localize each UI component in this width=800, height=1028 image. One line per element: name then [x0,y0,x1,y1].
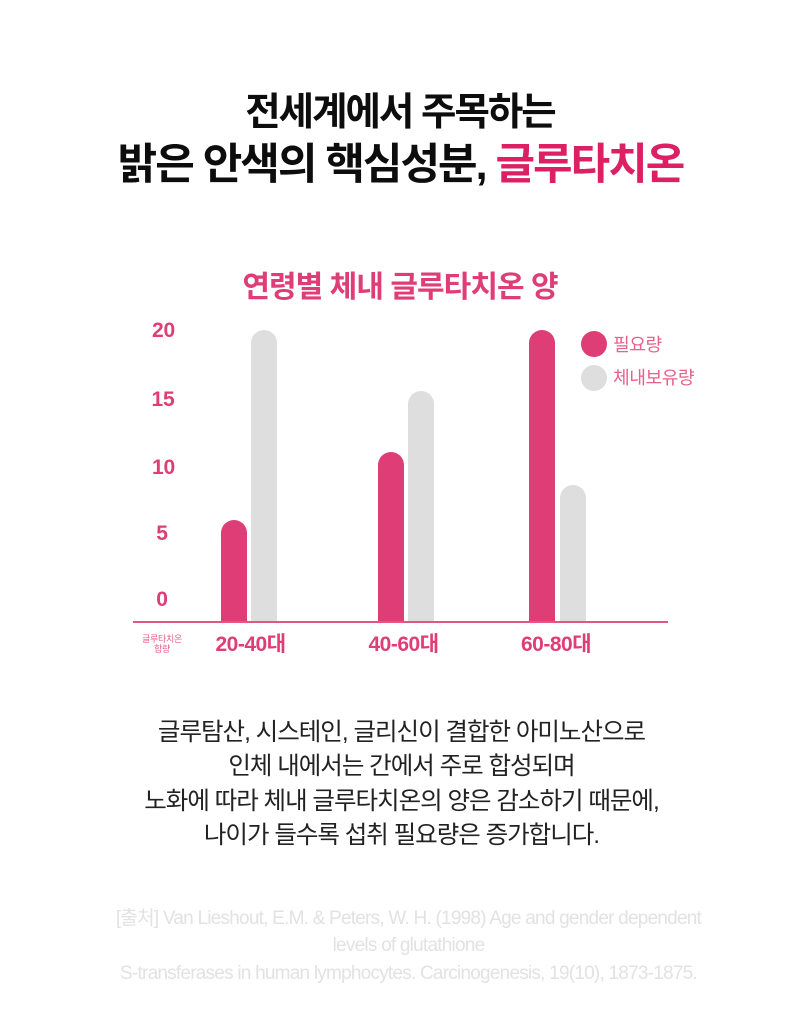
x label 40-60: 40-60대 [368,633,439,656]
legend: needed [581,331,662,357]
chart heading: 연령별 체내 글루타치온 양 [242,271,558,304]
title [118,91,684,189]
description text: 나이가 들수록 섭취 필요량은 증가합니다. [204,822,599,849]
description text [144,719,659,849]
description text: 인체 내에서는 간에서 주로 합성되며 [228,753,575,780]
description text: 노화에 따라 체내 글루타치온의 양은 감소하기 때문에, [144,788,659,815]
description text: 글루탐산, 시스테인, 글리신이 결합한 아미노산으로 [158,719,645,746]
axis caption [142,634,182,654]
axis line [133,621,668,622]
source citation: [출처] Van Lieshout, E.M. & Peters, W. H. (1998) Age and gender dependent [116,908,701,929]
y axis label 0: 0 [156,588,168,611]
title line 1: 전세계에서 주목하는 [245,91,555,134]
x label 20-40: 20-40대 [215,633,286,656]
bar: 20-40 stored [251,330,277,621]
legend: needed: 필요량 [613,335,662,355]
source citation: levels of glutathione [333,935,484,956]
axis caption: 글루타치온 [142,634,182,644]
x label 60-80: 60-80대 [521,633,591,656]
y axis label 5: 5 [156,522,168,545]
y axis label 10: 10 [152,456,175,479]
bar chart [133,319,694,656]
y axis label 15: 15 [152,388,174,411]
bar: 40-60 stored [408,391,434,621]
bar: 40-60 needed [378,452,404,621]
axis caption: 함량 [154,644,170,654]
legend: stored: 체내보유량 [613,368,694,388]
source citation [116,908,702,984]
source citation: S-transferases in human lymphocytes. Carcinogenesis, 19(10), 1873-1875. [120,963,697,984]
legend: stored [581,365,694,391]
y axis label 20: 20 [152,319,175,342]
bar: 20-40 needed [221,520,247,621]
bar: 60-80 needed [529,330,555,621]
bar: 60-80 stored [560,485,586,621]
title line 2: 밝은 안색의 핵심성분, 글루타치온 [118,141,683,189]
